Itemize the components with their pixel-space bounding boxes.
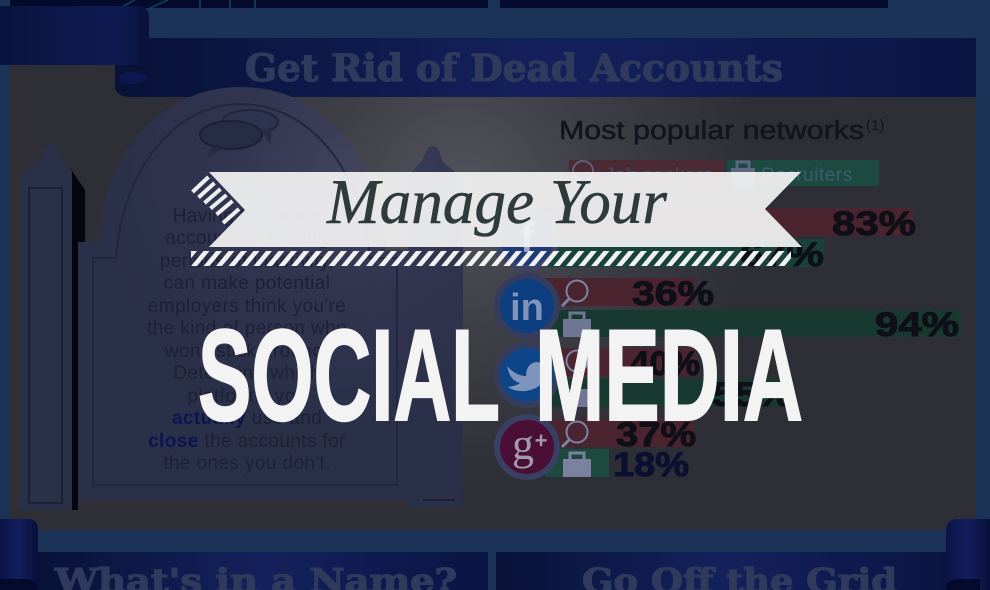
row: facebook — [494, 205, 916, 274]
row: facebook: 67% — [740, 236, 824, 274]
heading banner: Get Rid of Dead Accounts — [0, 6, 976, 97]
row: google plus — [494, 414, 696, 484]
row: facebook: f — [520, 214, 535, 261]
top strip of previous section — [10, 0, 888, 8]
tombstone text — [147, 206, 347, 474]
panel: dead accounts body — [10, 60, 976, 530]
chart heading: Most popular networks: (1) — [866, 117, 884, 134]
chart heading: Most popular networks: Most popular networks — [559, 117, 864, 145]
tombstone text: Determine which — [173, 363, 321, 384]
legend: Recruiters — [761, 165, 853, 186]
bar chart — [494, 205, 961, 484]
left stripes — [192, 177, 239, 223]
legend: Job seekers — [605, 165, 713, 186]
tombstone text: the ones you don't. — [163, 453, 331, 474]
tombstone illustration — [20, 87, 463, 510]
tombstone text: the kind of person who — [147, 318, 347, 339]
tombstone text: employers think you're — [148, 296, 346, 317]
row: google plus: + — [535, 428, 547, 453]
tombstone text: actually use and — [172, 408, 322, 429]
title: SOCIAL MEDIA: SOCIAL — [198, 302, 500, 448]
row: facebook: 83% — [832, 205, 916, 243]
tombstone text: won't stick around. — [164, 341, 329, 362]
row: twitter: 40% — [630, 345, 700, 383]
tombstone text: accounts with long — [165, 228, 329, 249]
script title: Manage Your — [326, 166, 668, 237]
row: linkedin: in — [510, 287, 544, 329]
row: twitter — [494, 342, 792, 414]
legend — [569, 160, 879, 186]
row: google plus: 18% — [613, 446, 689, 484]
ribbon: top-left scroll — [0, 6, 149, 90]
bottom panel: What's in a Name? — [38, 552, 488, 590]
row: google plus: g — [512, 420, 534, 469]
tombstone text: platforms you — [187, 386, 307, 407]
row: linkedin — [494, 273, 961, 344]
title banner: Manage Your — [191, 166, 802, 266]
heading text: Get Rid of Dead Accounts — [245, 46, 783, 90]
tombstone text: periods of inactivity, — [160, 251, 334, 272]
bottom stripes — [191, 251, 791, 266]
row: linkedin: 94% — [875, 306, 959, 344]
title: SOCIAL MEDIA: MEDIA — [535, 302, 803, 448]
banner ribbon — [209, 172, 802, 247]
bottom panel: Go Off the Grid — [496, 552, 946, 590]
tombstone text: can make potential — [164, 273, 330, 294]
icon: speech bubbles — [200, 110, 278, 157]
ribbon: bottom-left — [0, 519, 38, 590]
tombstone text: Having too many — [173, 206, 321, 227]
row: linkedin: 36% — [632, 275, 714, 313]
row: twitter: 55% — [712, 376, 792, 414]
tombstone text: close the accounts for — [148, 431, 346, 452]
ribbon: bottom-right — [946, 519, 990, 590]
row: google plus: 37% — [616, 416, 696, 454]
